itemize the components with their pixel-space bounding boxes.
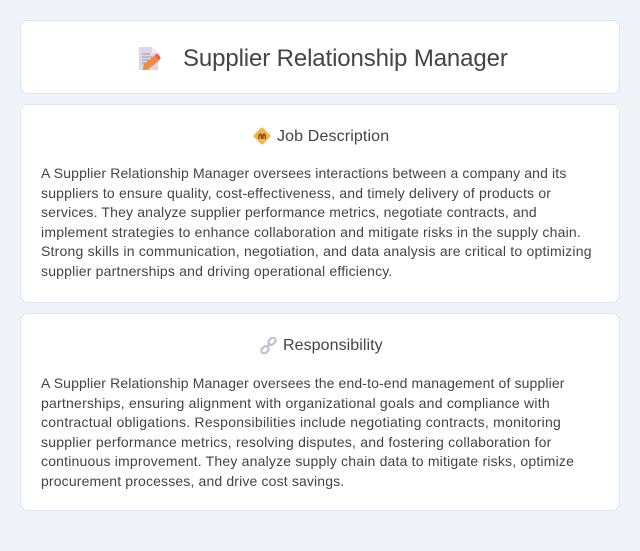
text block: job description: services. They analyze supplier performance metrics, negotiate contracts, and	[41, 204, 537, 220]
panel: responsibility	[20, 313, 620, 511]
text block: job description	[41, 165, 592, 279]
text block: job description: implement strategies to enhance collaboration and mitigate risks in the supply chain.	[41, 224, 581, 240]
text block: responsibility: partnerships, ensuring alignment with organizational goals and compliance with	[41, 395, 550, 411]
heading: responsibility: Responsibility	[283, 337, 383, 354]
text block: responsibility: supplier performance metrics, resolving disputes, and fostering collaboration for	[41, 434, 552, 450]
text block: job description: Strong skills in communication, negotiation, and data analysis are critical to optimizing	[41, 243, 592, 259]
panel: title card	[20, 20, 620, 94]
title: Supplier Relationship Manager	[183, 45, 508, 72]
text block: responsibility	[41, 375, 574, 489]
icon: chain link	[260, 337, 277, 354]
text block: job description: A Supplier Relationship Manager oversees interactions between a company and its	[41, 165, 566, 181]
text block: responsibility: procurement processes, and drive cost savings.	[41, 473, 344, 489]
icon: document with pencil	[139, 47, 161, 70]
text block: responsibility: contractual obligations. Responsibilities include negotiating contracts, monitoring	[41, 414, 561, 430]
panel: job description	[20, 104, 620, 303]
icon: diamond warning sign	[254, 128, 270, 144]
text block: responsibility: A Supplier Relationship Manager oversees the end-to-end management of supplier	[41, 375, 565, 391]
text block: job description: suppliers to ensure quality, cost-effectiveness, and timely delivery of products or	[41, 185, 551, 201]
text block: responsibility: continuous improvement. They analyze supply chain data to mitigate risks, optimize	[41, 453, 574, 469]
heading: job description: Job Description	[277, 128, 389, 145]
text block: job description: supplier partnerships and driving operational efficiency.	[41, 263, 393, 279]
